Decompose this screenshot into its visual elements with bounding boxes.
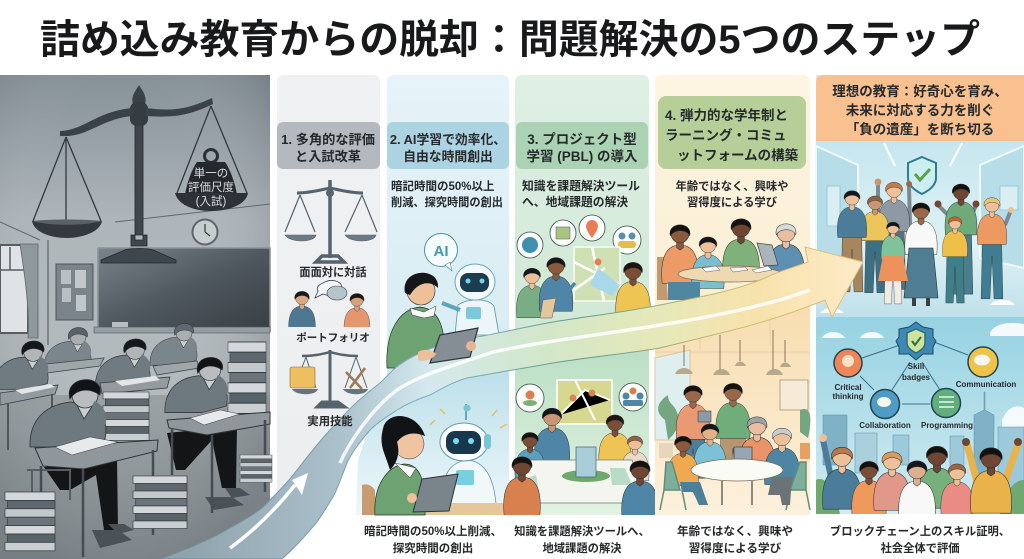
robot lower [430,404,507,504]
description 4: 習得度による学び [687,195,778,209]
panel 3: PBL [515,75,650,350]
caption 5: ブロックチェーン上のスキル証明、 [830,524,1010,538]
panel: current exam-driven classroom [0,75,272,559]
caption 3: 知識を課題解決ツールへ、 [514,524,650,538]
back row students [44,323,199,375]
badge: Communication: Communication [956,380,1016,389]
icon: scale with folder and tools [290,350,368,407]
city map [574,247,620,301]
panel 3 lower image: community project table [500,328,658,527]
caption 4 [677,524,793,555]
ideal header [816,75,1024,141]
icon: balance scale [285,180,377,262]
caption 5 [830,524,1010,555]
caption 4: 年齢ではなく、興味や [677,524,793,538]
header 2: 自由な時間創出 [403,149,493,164]
city buildings [823,392,1024,500]
badge: Collaboration [859,390,911,430]
panel 2 lower image: student with robot [356,350,509,515]
tablet held by student [418,328,478,363]
pendant lamps [675,330,791,375]
weight: 単一の評価尺度 [175,150,248,211]
central shield badge: Skill badges [896,322,936,382]
description 2: 暗記時間の50%以上 [391,179,495,193]
people standing [837,178,1014,306]
speech bubble AI [424,234,458,271]
ideal header: 理想の教育：好奇心を育み、 [832,83,1008,99]
network arrows [860,342,968,404]
description 3: 知識を課題解決ツール [522,179,640,193]
header 4: ットフォームの構築 [677,147,799,163]
label: portfolio: ポートフォリオ [296,332,370,344]
header 3: 3. プロジェクト型 [527,132,637,147]
caption 2 [364,524,502,555]
blackboard [94,248,270,333]
header 4: 4. 弾力的な学年制と [665,107,788,123]
student [387,273,445,368]
robot [442,264,499,335]
label: face-to-face: 面面対に対話 [299,265,367,279]
panel 4: flexible grade system [655,75,810,327]
shield icon [908,157,936,194]
header 4 [658,96,806,169]
header 3 [516,122,648,169]
window [655,350,690,440]
bushes [816,479,1024,514]
captions under lower images [364,524,1010,555]
arrow: growth path from classroom to ideal education [160,247,863,559]
students around map [516,258,650,318]
panel: ideal education [816,75,1024,526]
window and curtain [0,244,38,338]
caption 3: 地域課題の解決 [542,541,622,555]
caption 2: 暗記時間の50%以上削減、 [364,524,502,538]
icon: dialogue people [280,280,380,335]
caption 4: 習得度による学び [689,541,782,555]
weight: 単一の評価尺度: 単一の [194,166,228,180]
white direction arrow [230,473,308,548]
weight: 単一の評価尺度: 評価尺度 [188,181,234,194]
caption 5: 社会全体で評価 [880,541,960,555]
book stacks on desks [103,342,266,440]
badge: Programming: Programming [921,421,973,430]
caption 2: 探究時間の創出 [393,541,473,555]
title: 詰め込み教育からの脱却：問題解決の5つのステップ [40,18,980,62]
badge: Communication [956,347,1016,389]
badge: Programming [921,388,973,430]
central shield badge: Skill badges: badges [902,373,931,382]
label: practical skills: 実用技能 [307,414,353,428]
student at front desk [27,380,158,557]
table with model [515,447,648,503]
table and chair [400,503,509,515]
header 2: 2. AI学習で効率化、 [390,132,506,147]
community group at table [657,219,804,300]
header 3: 学習 (PBL) の導入 [526,148,638,164]
futuristic classroom with group [816,141,1024,317]
floor [0,395,270,559]
plants [658,395,810,459]
description 4: 年齢ではなく、興味や [676,179,788,193]
ideal header: 「負の遺産」を断ち切る [846,121,994,137]
panel 4 lower image: multi-age learning [650,284,812,527]
panel 1: multi-faceted evaluation [277,75,380,495]
panel 2: AI learning [387,75,509,390]
standing adults [676,383,750,478]
wall map [557,380,612,424]
celebrating crowd [816,434,1024,526]
scale of single evaluation [32,85,248,263]
project students in front [504,457,658,519]
header 1: 1. 多角的な評価 [281,131,375,147]
notice board [56,264,93,320]
badge: Collaboration: Collaboration [859,421,911,430]
ideal header: 未来に対応する力を削ぐ [846,102,994,118]
description 2 [391,179,503,209]
header 1 [277,122,380,169]
weight: 単一の評価尺度: (入試) [196,195,226,208]
bubble: pin [516,384,544,412]
middle row students [0,339,170,450]
central shield badge: Skill badges: Skill [908,362,924,371]
bubble: people [619,383,647,411]
description 4 [676,179,788,209]
badge: Critical thinking: thinking [832,392,864,401]
skill badge network and city [816,317,1024,526]
student at right desk [165,357,270,513]
header 1: と入試改革 [295,148,361,164]
bubbles: globe, map, pin, people [517,215,641,258]
header 2 [387,122,509,169]
project students behind table [515,408,649,481]
student lower [375,416,458,515]
speech bubble AI: AI [434,243,448,260]
clock [192,220,218,244]
floor book stacks [5,455,272,551]
caption 3 [514,524,650,555]
description 2: 削減、探究時間の創出 [391,195,503,209]
description 3: へ、地域課題の解決 [522,195,628,209]
description 3 [522,179,640,209]
seated learners and table [660,417,810,510]
badge: Critical thinking [832,349,864,401]
badge: Critical thinking: Critical [834,383,862,392]
shelf [780,380,808,410]
header 4: ラーニング・コミュ [665,127,786,143]
